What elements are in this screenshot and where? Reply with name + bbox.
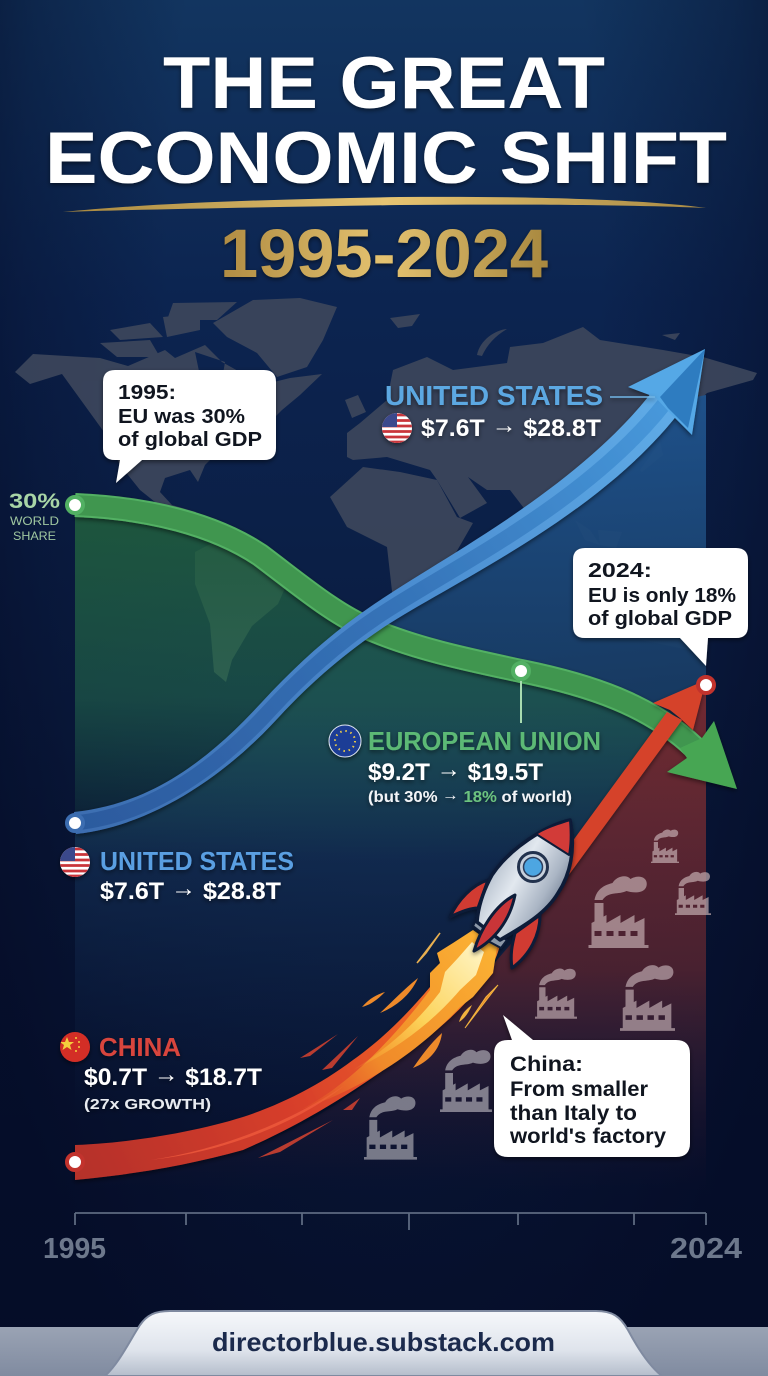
callout: China: than Italy to xyxy=(510,1102,637,1125)
footer xyxy=(0,1311,768,1376)
center fin xyxy=(474,895,515,951)
green line: European Union xyxy=(75,505,737,789)
area under blue line xyxy=(75,395,706,1195)
icon: EU flag xyxy=(329,725,361,757)
callout: 1995: of global GDP xyxy=(118,429,262,451)
callout: 2024: 2024: xyxy=(588,560,652,582)
gold brush underline xyxy=(63,197,706,212)
hull xyxy=(477,820,572,940)
EU 1995 marker xyxy=(67,497,83,513)
map: northern islands and UK xyxy=(345,314,680,418)
label: European Union: EUROPEAN UNION xyxy=(368,726,601,756)
factory 3 xyxy=(588,876,648,948)
left fin xyxy=(450,880,488,917)
factory 7 xyxy=(364,1096,417,1160)
label: 30% world share xyxy=(9,490,60,543)
title: THE GREAT xyxy=(163,43,605,124)
axis label 1995: 1995 xyxy=(43,1233,106,1265)
label: China: CHINA xyxy=(99,1032,181,1062)
red arrow head xyxy=(653,680,706,730)
map: Australia xyxy=(622,580,705,650)
flame sparks xyxy=(258,933,498,1158)
icon: US flag xyxy=(382,413,412,443)
label: European Union: of world) xyxy=(501,789,567,806)
callout: 2024: EU is only 18% xyxy=(588,585,736,607)
heading xyxy=(45,43,727,292)
label: United States (top): → xyxy=(492,412,517,439)
flame core xyxy=(353,942,484,1070)
timeline axis xyxy=(43,1213,742,1265)
callout: China: From smaller xyxy=(510,1078,648,1101)
label: China: → xyxy=(154,1061,178,1088)
US 1995 marker xyxy=(67,815,83,831)
factories xyxy=(364,830,711,1160)
map: South America xyxy=(195,541,292,682)
map: Africa xyxy=(330,467,473,602)
label: United States (top) xyxy=(382,380,655,443)
label: United States (top): UNITED STATES xyxy=(385,380,603,411)
label: United States (top): $28.8T xyxy=(517,415,601,442)
flame body xyxy=(300,930,497,1110)
callout: China: China: xyxy=(510,1053,583,1076)
callout: China: world's factory xyxy=(509,1125,666,1148)
label: China: $18.7T xyxy=(178,1064,262,1091)
EU mid marker with leader xyxy=(513,663,529,723)
map: Japan and southeast islands xyxy=(575,442,663,548)
area under green line xyxy=(75,505,706,860)
factory 4 xyxy=(535,969,577,1019)
label: European Union: (but 30% xyxy=(368,789,433,806)
blue line: United States xyxy=(74,349,705,834)
map: Greenland xyxy=(213,298,337,377)
website url: directorblue.substack.com xyxy=(212,1327,555,1357)
callout: 1995: 1995: xyxy=(118,382,176,404)
nose cone xyxy=(536,820,571,855)
red arrow shaft xyxy=(560,712,682,887)
label: 30% world share: WORLD xyxy=(10,514,59,528)
label: European Union: $19.5T xyxy=(461,759,543,786)
callout: 1995: EU was 30% xyxy=(118,406,245,428)
icon: US flag xyxy=(60,847,90,877)
nozzles xyxy=(473,918,507,948)
title xyxy=(45,43,727,199)
label: 30% world share: 30% xyxy=(9,490,60,513)
porthole xyxy=(518,852,548,882)
label: European Union: → xyxy=(442,787,459,804)
footer tab xyxy=(105,1311,662,1376)
label: United States (bottom): $28.8T xyxy=(196,878,281,905)
area under red line xyxy=(75,685,706,1190)
label: European Union: $9.2T xyxy=(368,759,429,786)
label: European Union: → xyxy=(437,756,461,783)
chart area fills xyxy=(75,395,706,1195)
map: North America xyxy=(15,345,322,528)
label: China xyxy=(60,1032,262,1113)
factory 1 xyxy=(651,830,679,863)
label: United States (bottom) xyxy=(60,846,294,905)
world map xyxy=(15,298,757,682)
data markers xyxy=(67,497,714,1170)
factory 6 xyxy=(440,1050,492,1112)
icon: China flag xyxy=(60,1032,90,1062)
red line: China xyxy=(75,680,706,1180)
factory 2 xyxy=(675,872,711,915)
map: Eurasia xyxy=(347,327,757,520)
label: China: $0.7T xyxy=(84,1064,145,1091)
title: ECONOMIC SHIFT xyxy=(45,118,727,199)
China 2024 marker xyxy=(698,677,714,693)
label: European Union: 18% xyxy=(459,789,497,806)
years subtitle: 1995-2024 xyxy=(220,215,548,292)
callout: 2024: of global GDP xyxy=(588,608,732,630)
map: Canadian islands xyxy=(100,302,237,357)
label: United States (top): $7.6T xyxy=(421,415,482,442)
callout: China xyxy=(494,1015,690,1157)
China 1995 marker xyxy=(67,1154,83,1170)
label: 30% world share: SHARE xyxy=(13,529,56,543)
right fin xyxy=(511,915,540,968)
factory 5 xyxy=(620,965,675,1031)
label: China: (27x GROWTH) xyxy=(84,1096,211,1113)
label: United States (bottom): $7.6T xyxy=(100,878,161,905)
label: United States (bottom): → xyxy=(171,875,196,902)
red trail xyxy=(75,945,500,1180)
callout: 1995 xyxy=(103,370,276,483)
trail highlight xyxy=(150,1085,345,1160)
callout: 2024 xyxy=(573,548,748,666)
axis label 2024: 2024 xyxy=(670,1233,742,1265)
rocket xyxy=(450,820,572,968)
label: United States (bottom): UNITED STATES xyxy=(100,846,294,876)
label: European Union xyxy=(329,725,601,806)
